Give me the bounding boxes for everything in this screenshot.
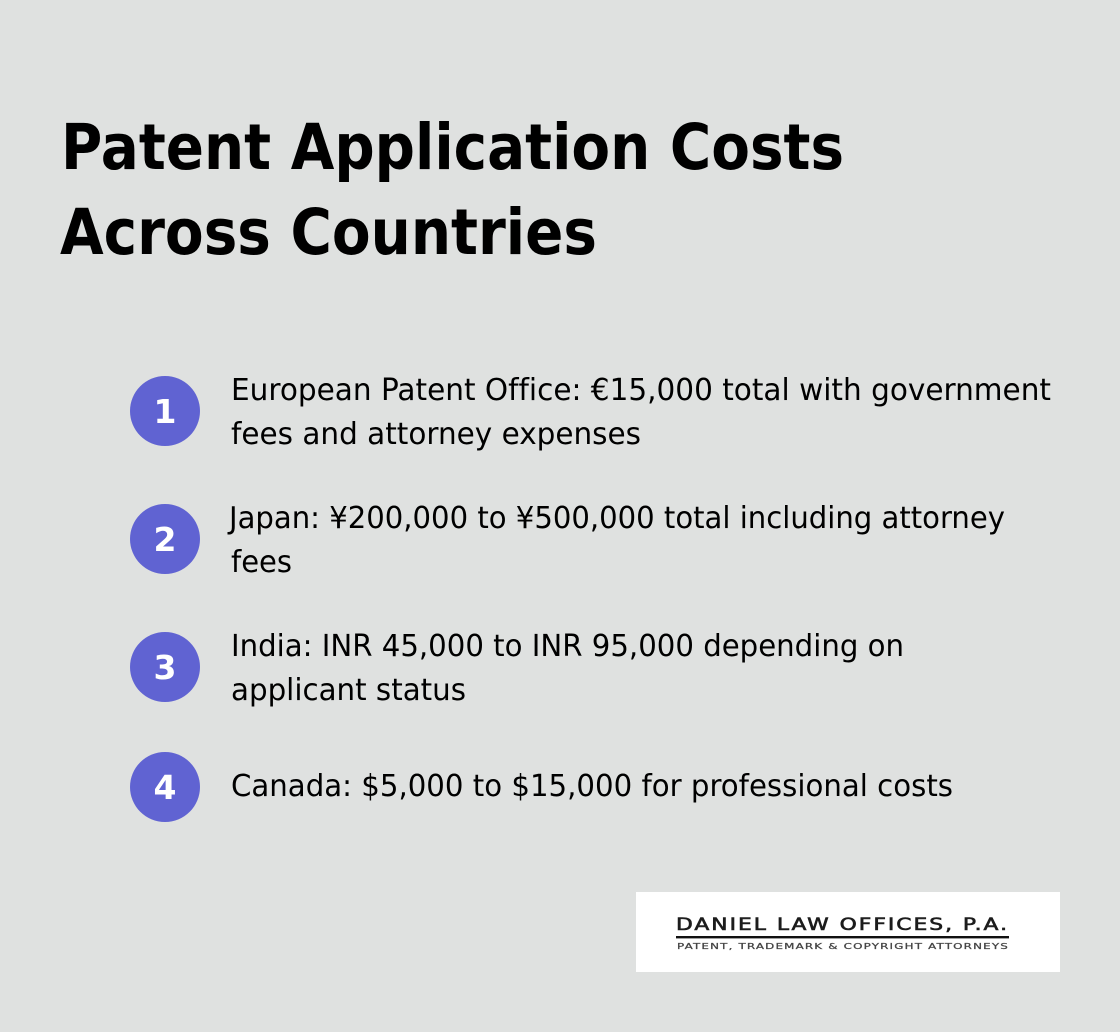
logo: Daniel Law Offices bbox=[636, 892, 1060, 972]
item 3 text: applicant status bbox=[231, 673, 466, 708]
item 2 text: fees bbox=[231, 545, 292, 580]
number badge 3: 3 bbox=[154, 648, 176, 687]
list item 4: Canada bbox=[130, 752, 953, 822]
list item 1: European Patent Office bbox=[130, 373, 1051, 452]
number badge 1: 1 bbox=[154, 392, 176, 431]
title bbox=[60, 111, 844, 269]
item 1 text: fees and attorney expenses bbox=[231, 417, 641, 452]
number badge 4 bbox=[130, 752, 200, 822]
item 1 text: European Patent Office: €15,000 total with government bbox=[231, 373, 1051, 408]
item 1 text bbox=[231, 373, 1051, 452]
title: Across Countries bbox=[60, 196, 597, 269]
item 2 text: Japan: ¥200,000 to ¥500,000 total including attorney bbox=[227, 501, 1005, 536]
number badge 2: 2 bbox=[154, 520, 176, 559]
title: Patent Application Costs bbox=[61, 111, 844, 184]
list item 2: Japan bbox=[130, 501, 1005, 580]
list item 3: India bbox=[130, 629, 904, 708]
item 4 text: Canada: $5,000 to $15,000 for professional costs bbox=[231, 769, 953, 804]
logo: Daniel Law Offices: DANIEL LAW OFFICES, P.A. bbox=[676, 915, 1009, 934]
item 3 text: India: INR 45,000 to INR 95,000 depending on bbox=[231, 629, 904, 664]
number badge 3 bbox=[130, 632, 200, 702]
number badge 2 bbox=[130, 504, 200, 574]
logo: Daniel Law Offices: PATENT, TRADEMARK & COPYRIGHT ATTORNEYS bbox=[677, 942, 1009, 951]
number badge 4: 4 bbox=[154, 768, 176, 807]
number badge 1 bbox=[130, 376, 200, 446]
item 2 text bbox=[227, 501, 1005, 580]
item 3 text bbox=[231, 629, 904, 708]
